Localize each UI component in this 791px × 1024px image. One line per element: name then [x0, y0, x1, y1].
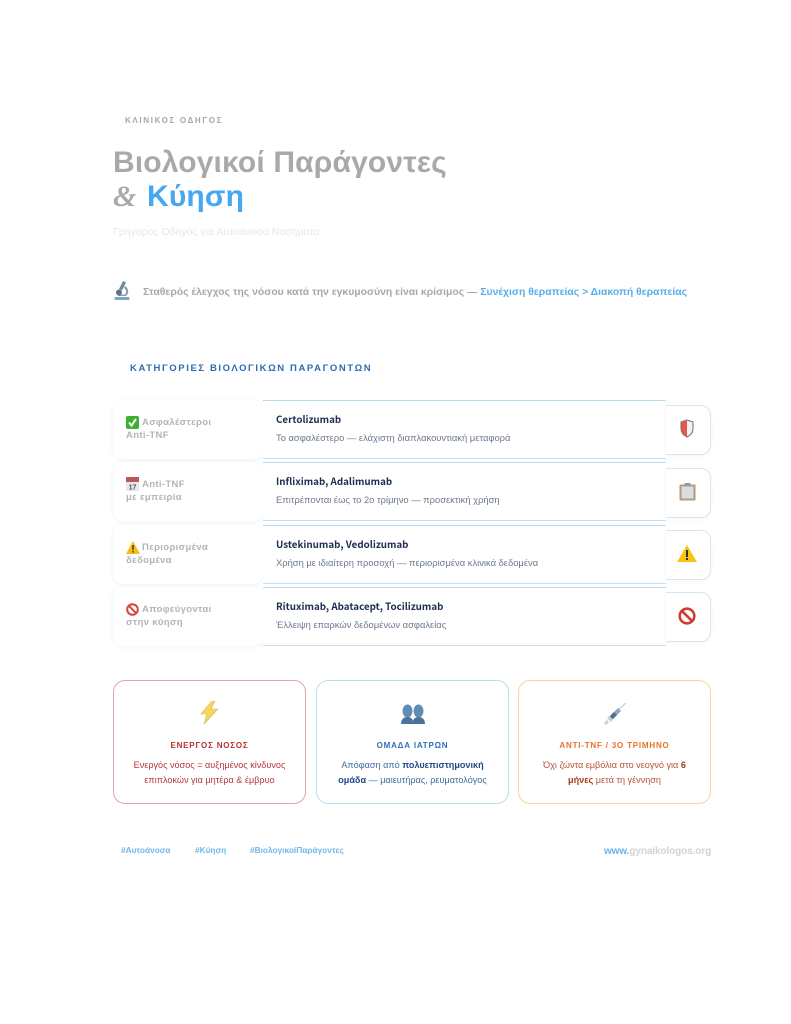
row 1 content: Το ασφαλέστερο — ελάχιστη διαπλακουντιακή μεταφορά [276, 432, 510, 443]
icon: people [401, 704, 425, 724]
section heading: ΚΑΤΗΓΟΡΙΕΣ ΒΙΟΛΟΓΙΚΩΝ ΠΑΡΑΓΟΝΤΩΝ [130, 363, 372, 374]
row 2 label: Anti-TNF [142, 479, 185, 490]
row 3 content [263, 525, 666, 584]
card text: μήνες μετά τη γέννηση [568, 775, 661, 785]
card text [134, 760, 286, 785]
hashtag 3: #ΒιολογικοίΠαράγοντες [250, 845, 344, 855]
card: active disease [113, 680, 306, 804]
row 1 icon: shield [666, 405, 711, 455]
row 4 label: Αποφεύγονται [142, 604, 212, 615]
icon: warning [126, 541, 140, 554]
row 2 content: Infliximab, Adalimumab [276, 474, 392, 488]
hashtag 2: #Κύηση [195, 845, 226, 855]
row 4: avoid in pregnancy [120, 587, 711, 646]
row 1: safest anti-TNF [120, 400, 711, 460]
card text: Όχι ζώντα εμβόλια στο νεογνό για 6 [543, 760, 686, 770]
card text: Απόφαση από πολυεπιστημονική [341, 760, 484, 770]
title: Βιολογικοί Παράγοντες [113, 146, 447, 179]
title [113, 146, 447, 213]
card text [338, 760, 487, 785]
eyebrow label: ΚΛΙΝΙΚΟΣ ΟΔΗΓΟΣ [125, 116, 223, 125]
icon: check [126, 416, 139, 429]
row 4 icon: prohibited [666, 592, 711, 642]
row 3 content: Χρήση με ιδιαίτερη προσοχή — περιορισμένα κλινικά δεδομένα [276, 557, 538, 568]
card: anti-TNF third trimester [518, 680, 711, 804]
card heading: ΕΝΕΡΓΟΣ ΝΟΣΟΣ [170, 741, 249, 750]
key message text: Σταθερός έλεγχος της νόσου κατά την εγκυμοσύνη είναι κρίσιμος — Συνέχιση θεραπείας > Διακοπή θεραπείας [143, 287, 687, 298]
row 1 label: Ασφαλέστεροι [142, 417, 211, 428]
row 3 label: δεδομένα [126, 555, 172, 566]
row 3 label [113, 525, 263, 584]
card: medical team [316, 680, 509, 804]
icon: calendar [126, 477, 139, 491]
row 2 content [263, 462, 666, 521]
row 1 content [263, 400, 666, 459]
card text: Ενεργός νόσος = αυξημένος κίνδυνος [134, 760, 285, 770]
row 4 label [113, 587, 263, 646]
icon: syringe [604, 702, 626, 725]
row 4 content [263, 587, 666, 646]
key message [114, 281, 687, 300]
title: & [113, 180, 136, 213]
row 4 label: στην κύηση [126, 617, 183, 628]
icon: microscope [114, 281, 130, 300]
row 4 content: Έλλειψη επαρκών δεδομένων ασφαλείας [276, 619, 446, 630]
hashtag 1: #Αυτοάνοσα [121, 845, 171, 855]
row 2: experienced anti-TNF [120, 462, 711, 522]
row 2 label: με εμπειρία [126, 492, 182, 503]
icon: lightning [200, 701, 219, 724]
subtitle: Γρήγορος Οδηγός για Αυτοάνοσα Νοσήματα [113, 226, 320, 238]
row 3 content: Ustekinumab, Vedolizumab [276, 537, 408, 551]
row 3: limited data [120, 525, 711, 584]
row 2 icon: clipboard [666, 468, 711, 518]
row 3 icon: warning [666, 530, 711, 580]
card heading: ANTI-TNF / 3Ο ΤΡΙΜΗΝΟ [559, 741, 670, 750]
card heading: ΟΜΑΔΑ ΙΑΤΡΩΝ [377, 741, 448, 750]
card text [542, 760, 686, 785]
row 1 content: Certolizumab [276, 412, 341, 426]
row 2 content: Επιτρέπονται έως το 2ο τρίμηνο — προσεκτική χρήση [276, 494, 500, 505]
title: Κύηση [147, 180, 244, 213]
row 4 content: Rituximab, Abatacept, Tocilizumab [276, 599, 443, 613]
icon: prohibited [126, 603, 139, 616]
row 1 label [113, 400, 263, 459]
row 1 label: Anti-TNF [126, 430, 169, 441]
card text: επιπλοκών για μητέρα & έμβρυο [144, 775, 275, 785]
row 2 label [113, 462, 263, 521]
row 3 label: Περιορισμένα [142, 542, 208, 553]
website: www.gynaikologos.org [604, 846, 711, 857]
card text: ομάδα — μαιευτήρας, ρευματολόγος [338, 775, 487, 785]
